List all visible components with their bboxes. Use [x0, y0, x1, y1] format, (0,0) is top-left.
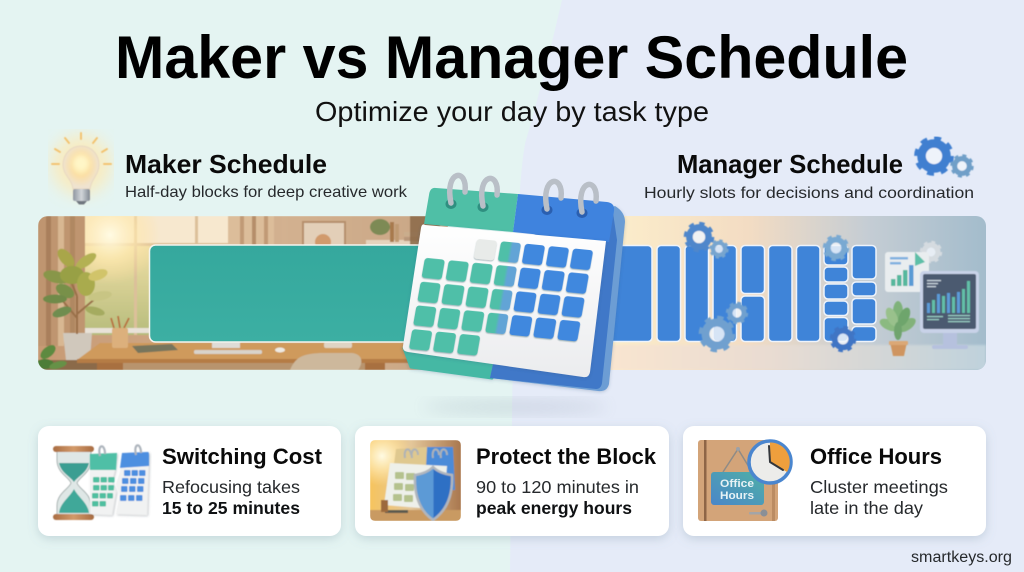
- card: protect the block: [352, 426, 669, 536]
- icon: gears header: [916, 138, 972, 176]
- window: [82, 216, 228, 336]
- icon: central calendar: [403, 175, 625, 391]
- source credit: smartkeys.org: [911, 549, 1012, 566]
- description: manager schedule: Hourly slots for decisions and coordination: [644, 185, 974, 202]
- panel: maker scene: [38, 216, 448, 370]
- card: switching cost: [38, 426, 341, 536]
- pencil cup: [111, 316, 129, 348]
- holes and binder rings: [446, 175, 596, 218]
- heading: manager schedule: Manager Schedule: [677, 149, 903, 179]
- plant on manager side: [878, 301, 918, 356]
- header teal: [424, 188, 518, 232]
- switching cost line 2: 15 to 25 minutes: [162, 498, 300, 518]
- book: [132, 344, 178, 353]
- office hours line 2: late in the day: [810, 498, 923, 518]
- office hours line 1: Cluster meetings: [810, 477, 948, 497]
- shelf with books: [366, 216, 440, 246]
- protect line 1: 90 to 120 minutes in: [476, 477, 639, 497]
- header blue: [513, 194, 614, 242]
- icon: light bulb: [51, 133, 111, 204]
- desk: [38, 343, 432, 370]
- protect heading: Protect the Block: [476, 444, 657, 469]
- date cells: [409, 234, 593, 365]
- icon: door sign and clock: Hours: [720, 490, 754, 502]
- title: Maker vs Manager Schedule: [115, 24, 908, 91]
- chart card: [885, 252, 929, 292]
- wall picture: [303, 222, 345, 250]
- calendar shadow: [423, 402, 607, 412]
- plant: [42, 246, 113, 334]
- icon: door sign and clock: [698, 440, 791, 521]
- icon: broken calendars: [90, 445, 149, 515]
- icon: door sign and clock: Office: [720, 478, 754, 490]
- background: blue right half: [510, 0, 1024, 572]
- panel: manager scene: [590, 216, 986, 370]
- switching cost heading: Switching Cost: [162, 444, 323, 469]
- office hours heading: Office Hours: [810, 444, 942, 469]
- small plant corner: [38, 344, 67, 370]
- white calendar body: [403, 224, 606, 377]
- curtains: [38, 216, 274, 346]
- switching cost line 1: Refocusing takes: [162, 477, 300, 497]
- heading: maker schedule: Maker Schedule: [125, 149, 327, 179]
- monitor: [920, 271, 979, 349]
- keyboard and mouse: [194, 342, 352, 354]
- protect line 2: peak energy hours: [476, 498, 632, 518]
- manager blocks: hourly slots: [600, 246, 876, 342]
- subtitle: Optimize your day by task type: [315, 96, 709, 127]
- icon: calendar and shield: [370, 440, 461, 521]
- chair: [290, 353, 361, 370]
- gears on slots: [686, 224, 941, 351]
- description: maker schedule: Half-day blocks for deep creative work: [125, 184, 408, 201]
- maker block: teal half-day block: [150, 245, 434, 342]
- pot: [63, 333, 92, 360]
- back layers: [404, 206, 625, 391]
- icon: hourglass: [53, 446, 94, 520]
- card: office hours: [683, 426, 986, 536]
